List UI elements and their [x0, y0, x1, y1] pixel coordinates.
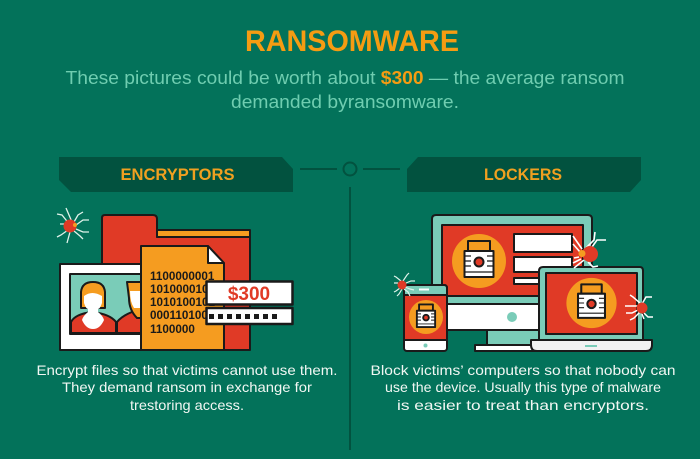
text: lockers description — [370, 362, 676, 413]
icon: padlock on laptop — [566, 278, 617, 328]
subtitle — [66, 68, 625, 112]
icon: bug on folder — [57, 208, 89, 243]
laptop — [531, 267, 652, 351]
text: encryptors description: trestoring access. — [130, 397, 244, 413]
password box — [206, 308, 292, 324]
header: lockers: LOCKERS — [484, 165, 562, 184]
photo with people — [60, 264, 150, 350]
document with binary code: 1010100101 — [150, 296, 216, 309]
icon: folder — [102, 215, 250, 350]
ransom box $300: $300 — [228, 284, 270, 305]
illustration: lockers — [404, 215, 652, 351]
document with binary code: 1010000101 — [150, 283, 216, 296]
man — [117, 312, 150, 333]
text: lockers description: is easier to treat than encryptors. — [397, 397, 649, 413]
monitor — [432, 215, 592, 351]
document with binary code: 1100000 — [150, 323, 195, 336]
header: lockers — [407, 157, 641, 192]
text: encryptors description: They demand ransom in exchange for — [62, 379, 312, 395]
subtitle: These pictures could be worth about $300 — the average ransom — [66, 68, 625, 88]
document with binary code — [141, 246, 224, 350]
icon: bug on monitor — [573, 232, 606, 268]
text: encryptors description — [36, 362, 338, 413]
icon: padlock on phone — [409, 300, 443, 334]
document with binary code: 0001101001 — [150, 309, 215, 322]
title: RANSOMWARE — [245, 25, 459, 58]
document with binary code: 1100000001 — [150, 270, 215, 283]
text: lockers description: Block victims’ computers so that nobody can — [370, 362, 676, 378]
header: encryptors: ENCRYPTORS — [120, 165, 234, 184]
header: encryptors — [59, 157, 293, 192]
icon: padlock on monitor — [452, 234, 506, 288]
subtitle: demanded byransomware. — [231, 92, 459, 112]
center divider — [300, 162, 400, 450]
text: lockers description: use the device. Usually this type of malware — [385, 379, 661, 395]
ransom box $300 — [206, 282, 292, 305]
phone — [404, 285, 447, 351]
text: encryptors description: Encrypt files so that victims cannot use them. — [36, 362, 338, 378]
illustration: encryptors — [60, 215, 292, 350]
icon: bug on phone — [394, 273, 415, 296]
woman — [71, 312, 116, 333]
login fields — [514, 234, 572, 284]
icon: bug on laptop — [625, 295, 653, 320]
